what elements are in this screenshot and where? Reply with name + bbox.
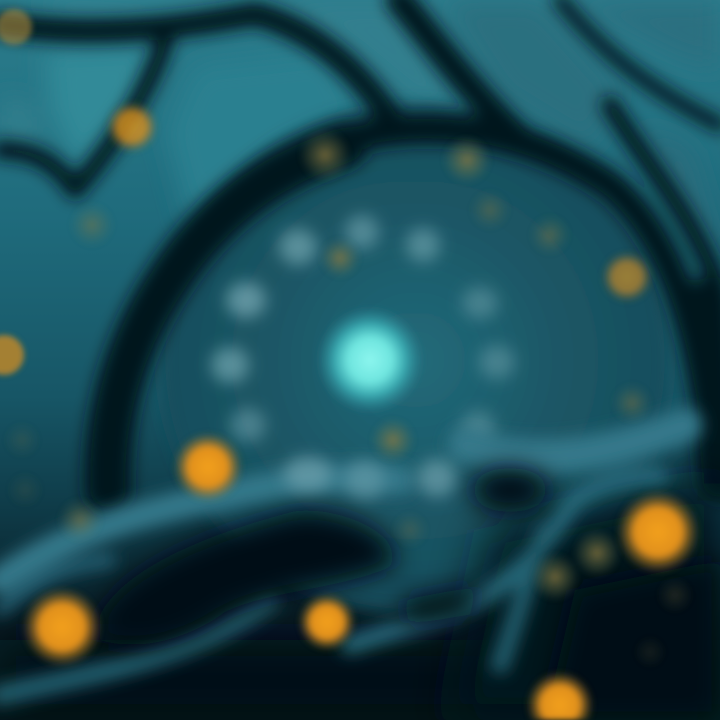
dark tree arc around dial xyxy=(0,0,720,490)
light foreground branches xyxy=(0,425,685,695)
lighter sky patches behind the branches xyxy=(2,2,714,208)
lower dial markers over the branch xyxy=(284,456,457,500)
lights at the left edge xyxy=(0,9,32,375)
dial hour markers xyxy=(211,215,515,445)
dim distant lights xyxy=(4,129,693,668)
dark foreground hollows xyxy=(100,468,720,720)
glowing dial centre xyxy=(319,310,420,410)
lower foreground shadow xyxy=(0,616,458,656)
dial disc xyxy=(160,105,670,615)
